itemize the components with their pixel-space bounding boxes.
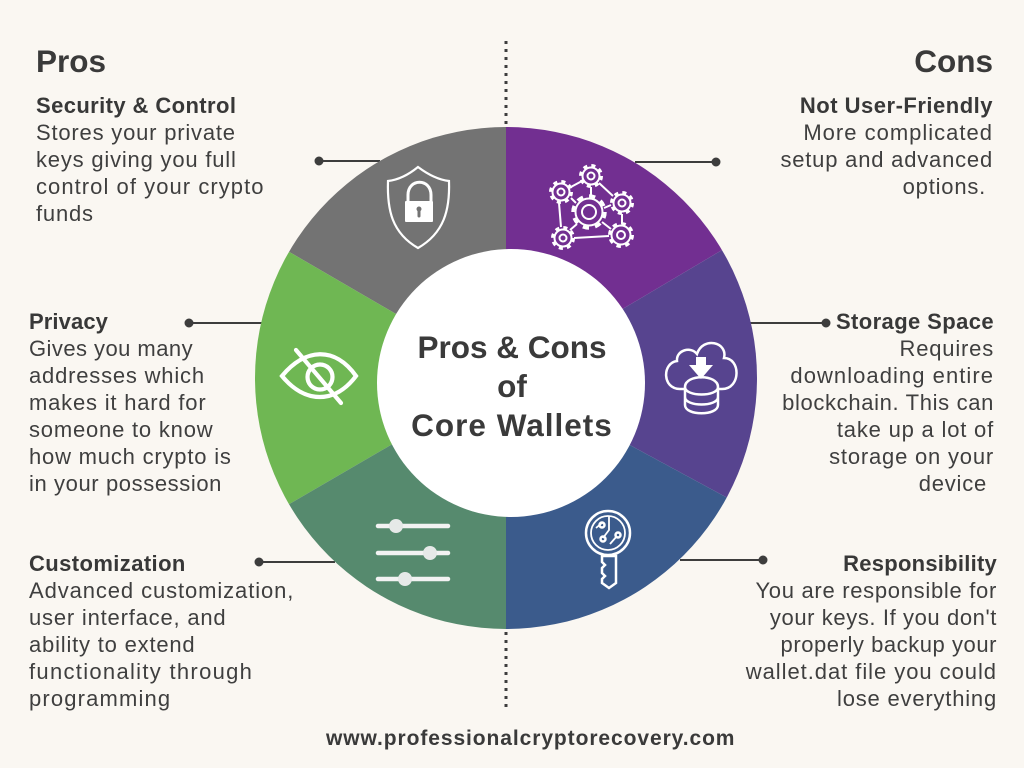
text: customization: programming (29, 686, 171, 711)
text: customization: functionality through (29, 659, 253, 684)
text: privacy: makes it hard for (29, 390, 206, 415)
text: not user-friendly (780, 93, 993, 199)
text: customization: Advanced customization, (29, 578, 294, 603)
text: security & control: funds (36, 201, 94, 226)
text: storage space: Requires (900, 336, 994, 361)
text: customization: Customization (29, 551, 186, 576)
text: privacy: how much crypto is (29, 444, 232, 469)
text: security & control: Security & Control (36, 93, 236, 118)
text: security & control: keys giving you full (36, 147, 237, 172)
text: not user-friendly: setup and advanced (780, 147, 993, 172)
icon: digital key (586, 511, 630, 588)
icon: shield with padlock (388, 167, 449, 248)
segment: security (289, 127, 506, 314)
center title (411, 329, 613, 443)
text: storage space (782, 309, 994, 496)
text: security & control: control of your crypto (36, 174, 265, 199)
text: storage space: storage on your (829, 444, 994, 469)
dotted divider lines (504, 41, 508, 708)
center circle (377, 249, 645, 517)
text: storage space: device (919, 471, 987, 496)
segment: customization (289, 444, 506, 629)
segment: storage space (622, 250, 757, 498)
segment: privacy (255, 252, 396, 504)
text: privacy: Privacy (29, 309, 108, 334)
donut segments (255, 127, 757, 629)
footer url: www.professionalcryptorecovery.com (326, 727, 735, 750)
wheel diagram (184, 41, 830, 707)
text: responsibility: Responsibility (843, 551, 997, 576)
text: responsibility: wallet.dat file you could (746, 659, 997, 684)
text: security & control (36, 93, 265, 226)
heading: pros: Pros (36, 43, 106, 79)
text: customization: user interface, and (29, 605, 226, 630)
segment: responsibility (506, 445, 727, 629)
text: privacy (29, 309, 232, 496)
text: responsibility: your keys. If you don't (770, 605, 997, 630)
text: customization: ability to extend (29, 632, 195, 657)
connector lines (186, 158, 830, 566)
text: not user-friendly: More complicated (803, 120, 993, 145)
text: responsibility: You are responsible for (755, 578, 997, 603)
text: privacy: someone to know (29, 417, 213, 442)
text: responsibility: lose everything (837, 686, 997, 711)
text: not user-friendly: Not User-Friendly (800, 93, 993, 118)
icon: cloud download database (666, 343, 737, 413)
center title: Pros & Cons (417, 329, 607, 365)
text: storage space: take up a lot of (837, 417, 994, 442)
icon: network of gears (550, 166, 632, 248)
text: storage space: blockchain. This can (782, 390, 994, 415)
center title: of (497, 368, 527, 404)
segment: not user-friendly (506, 127, 722, 309)
text: customization (29, 551, 294, 711)
text: privacy: in your possession (29, 471, 222, 496)
text: responsibility (746, 551, 997, 711)
text: storage space: Storage Space (836, 309, 994, 334)
icon: sliders (378, 519, 448, 586)
text: responsibility: properly backup your (781, 632, 997, 657)
text: storage space: downloading entire (790, 363, 994, 388)
center title: Core Wallets (411, 407, 613, 443)
text: not user-friendly: options. (903, 174, 986, 199)
icon: crossed-out eye (282, 350, 356, 403)
heading: cons: Cons (914, 43, 993, 79)
text: privacy: addresses which (29, 363, 205, 388)
text: privacy: Gives you many (29, 336, 193, 361)
text: security & control: Stores your private (36, 120, 236, 145)
